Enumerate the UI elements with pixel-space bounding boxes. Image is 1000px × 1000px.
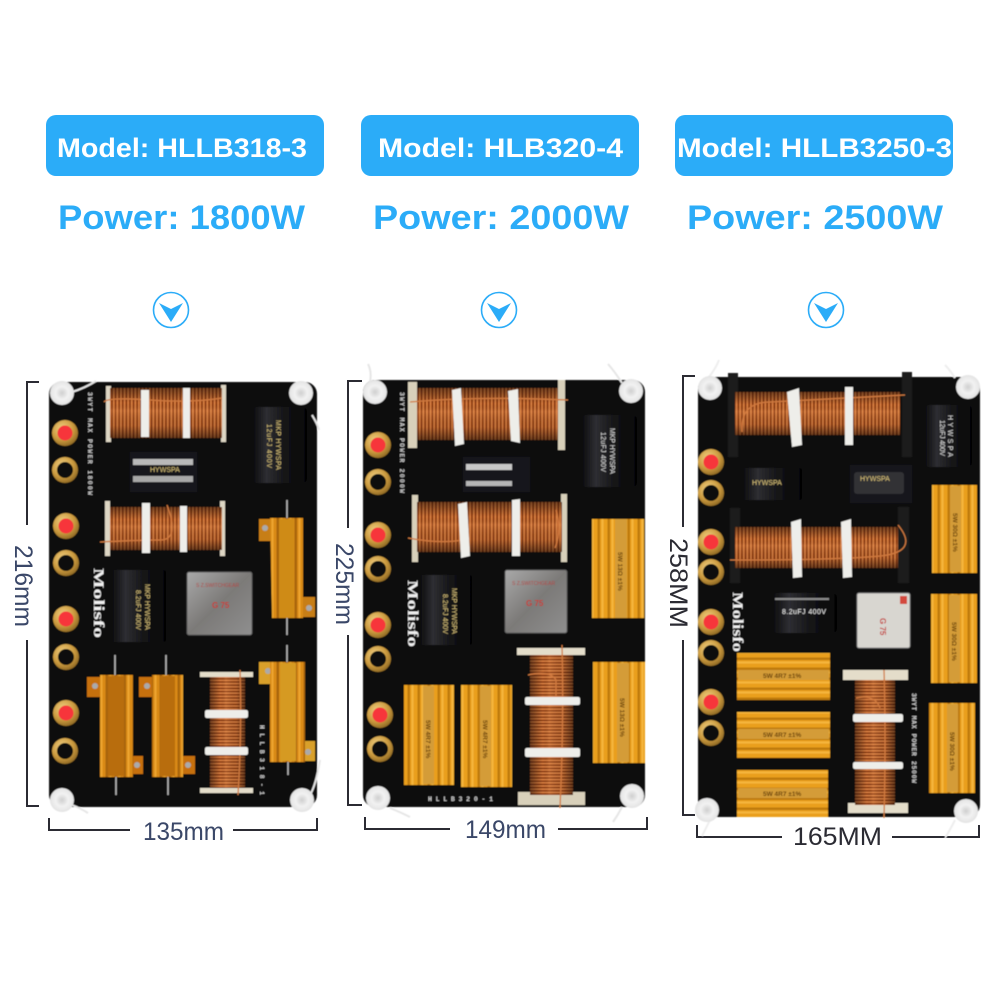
capacitor big (773, 593, 837, 633)
silver protection module: S Z.SWITCHGEAR (196, 583, 239, 589)
resistor horizontal 3 (737, 770, 828, 817)
resistor horizontal 1: 5W 4R7 ±1% (763, 673, 801, 680)
model badge: HLLB318-3 (46, 115, 324, 176)
resistor bottom middle (139, 655, 195, 795)
capacitor right: 12uFJ 400V (265, 424, 272, 468)
resistor bottom left (404, 685, 454, 785)
model badge: HLLB3250-3 (675, 115, 953, 176)
inductor vertical (843, 670, 908, 818)
resistor bottom middle (461, 685, 512, 787)
capacitor top left (743, 468, 802, 500)
inductor middle (408, 494, 567, 562)
silver protection module: G 75 (878, 618, 887, 636)
resistor horizontal 3: 5W 4R7 ±1% (763, 791, 801, 798)
capacitor right: 12uFJ 400V (599, 432, 606, 472)
inductor top (728, 372, 912, 457)
dimension: height 258MM: 258MM (664, 538, 692, 628)
small capacitor (463, 457, 530, 492)
inductor top (408, 380, 568, 450)
inductor vertical (200, 670, 253, 795)
resistor right middle (931, 594, 977, 683)
small capacitor (130, 452, 197, 492)
panel: crossover board HLLB318 (49, 381, 320, 813)
resistor bottom middle: 5W 4R7 ±1% (481, 720, 488, 758)
capacitor right (582, 415, 637, 487)
silver protection module (187, 572, 252, 635)
capacitor right: MKP HYWSPA (274, 420, 281, 470)
power: 2000W: Power: 2000W (373, 199, 630, 237)
resistor bottom left: 5W 4R7 ±1% (424, 720, 431, 758)
capacitor top right (850, 465, 912, 503)
panel: crossover board HLB320 (363, 364, 645, 822)
capacitor top right: HYWSPA (860, 476, 890, 483)
resistor right bottom: 5W 30Ω ±1% (948, 732, 955, 771)
capacitor mid: MKP HYWSPA (450, 588, 457, 634)
inductor vertical (517, 645, 585, 808)
dimension: width 165MM: 165MM (793, 823, 882, 851)
board label: 3WYT MAX POWER 2500W (910, 693, 917, 783)
resistor right top (592, 519, 644, 618)
capacitor mid: 8.2uFJ 400V (441, 594, 448, 634)
silver protection module: G 75 (212, 601, 230, 610)
model badge: HLB320-4 (361, 115, 639, 176)
capacitor top left: HYWSPA (752, 480, 782, 487)
capacitor right: MKP HYWSPA (608, 428, 615, 474)
mounting posts (695, 375, 980, 823)
mounting posts (50, 381, 314, 812)
capacitor mid (420, 575, 472, 645)
model badge: HLLB318-3: Model: HLLB318-3 (57, 133, 307, 163)
resistor horizontal 2: 5W 4R7 ±1% (763, 732, 801, 739)
inductor top (104, 385, 226, 442)
capacitor mid: 8.2uFJ 400V (134, 590, 141, 630)
icon: down arrow 2 (482, 292, 516, 328)
board label: 3WYT MAX POWER 1800W (86, 392, 93, 495)
dimension: height 225mm (330, 381, 362, 805)
resistor horizontal 1 (737, 653, 830, 700)
capacitor big: 8.2uFJ 400V (782, 609, 826, 616)
silver protection module (857, 593, 910, 648)
icon: down arrow 1 (154, 292, 188, 328)
capacitor right (253, 407, 307, 483)
resistor horizontal 2 (737, 712, 830, 758)
dimension: height 216mm (9, 382, 39, 806)
model badge: HLLB3250-3: Model: HLLB3250-3 (677, 133, 952, 163)
board model label: HLLB320-1 (428, 796, 493, 803)
logo: Molisfo (404, 580, 420, 647)
inductor middle (100, 501, 225, 556)
dimension: height 225mm: 225mm (330, 543, 358, 625)
panel: crossover board HLLB3250 (695, 360, 980, 838)
resistor right bottom (593, 662, 645, 763)
silver protection module: G 75 (526, 599, 544, 608)
dimension: width 149mm: 149mm (465, 816, 546, 844)
silver protection module (505, 570, 567, 633)
silver protection module: S Z.SWITCHGEAR (512, 581, 555, 587)
terminals (52, 420, 79, 764)
dimension: height 216mm: 216mm (9, 545, 37, 627)
capacitor right: HYWSPA (946, 415, 953, 457)
dimension: width 149mm (365, 816, 647, 844)
capacitor mid (112, 570, 166, 642)
board model label: HLLB318-1 (258, 725, 265, 795)
capacitor right (925, 405, 972, 467)
small capacitor: HYWSPA (150, 467, 180, 474)
resistor right middle: 5W 30Ω ±1% (950, 622, 957, 661)
dimension: height 258MM (664, 376, 695, 815)
dimension: width 135mm: 135mm (143, 818, 224, 846)
icon: down arrow 3 (808, 292, 844, 328)
resistor right top: 5W 13Ω ±1% (616, 552, 623, 591)
resistor right top: 5W 30Ω ±1% (951, 513, 958, 552)
inductor middle (730, 507, 909, 583)
resistor bottom left (87, 655, 143, 795)
logo: Molisfo (90, 568, 106, 638)
dimension: width 135mm (49, 818, 317, 846)
resistor right top (932, 485, 977, 573)
resistor right bottom: 5W 13Ω ±1% (618, 698, 625, 737)
resistor right bottom (259, 645, 315, 775)
terminals (365, 432, 393, 762)
mounting posts (363, 379, 644, 810)
board label: 3WYT MAX POWER 2000W (398, 392, 405, 493)
capacitor right: 12uFJ 400V (938, 420, 945, 456)
model badge: HLB320-4: Model: HLB320-4 (378, 133, 623, 163)
logo: Molisfo (729, 592, 745, 652)
power: 1800W: Power: 1800W (58, 199, 306, 237)
power: 2500W: Power: 2500W (687, 199, 944, 237)
resistor right bottom (929, 703, 975, 793)
dimension: width 165MM (697, 823, 979, 851)
terminals (698, 449, 724, 746)
capacitor mid: MKP HYWSPA (143, 584, 150, 630)
resistor right top (259, 500, 315, 635)
